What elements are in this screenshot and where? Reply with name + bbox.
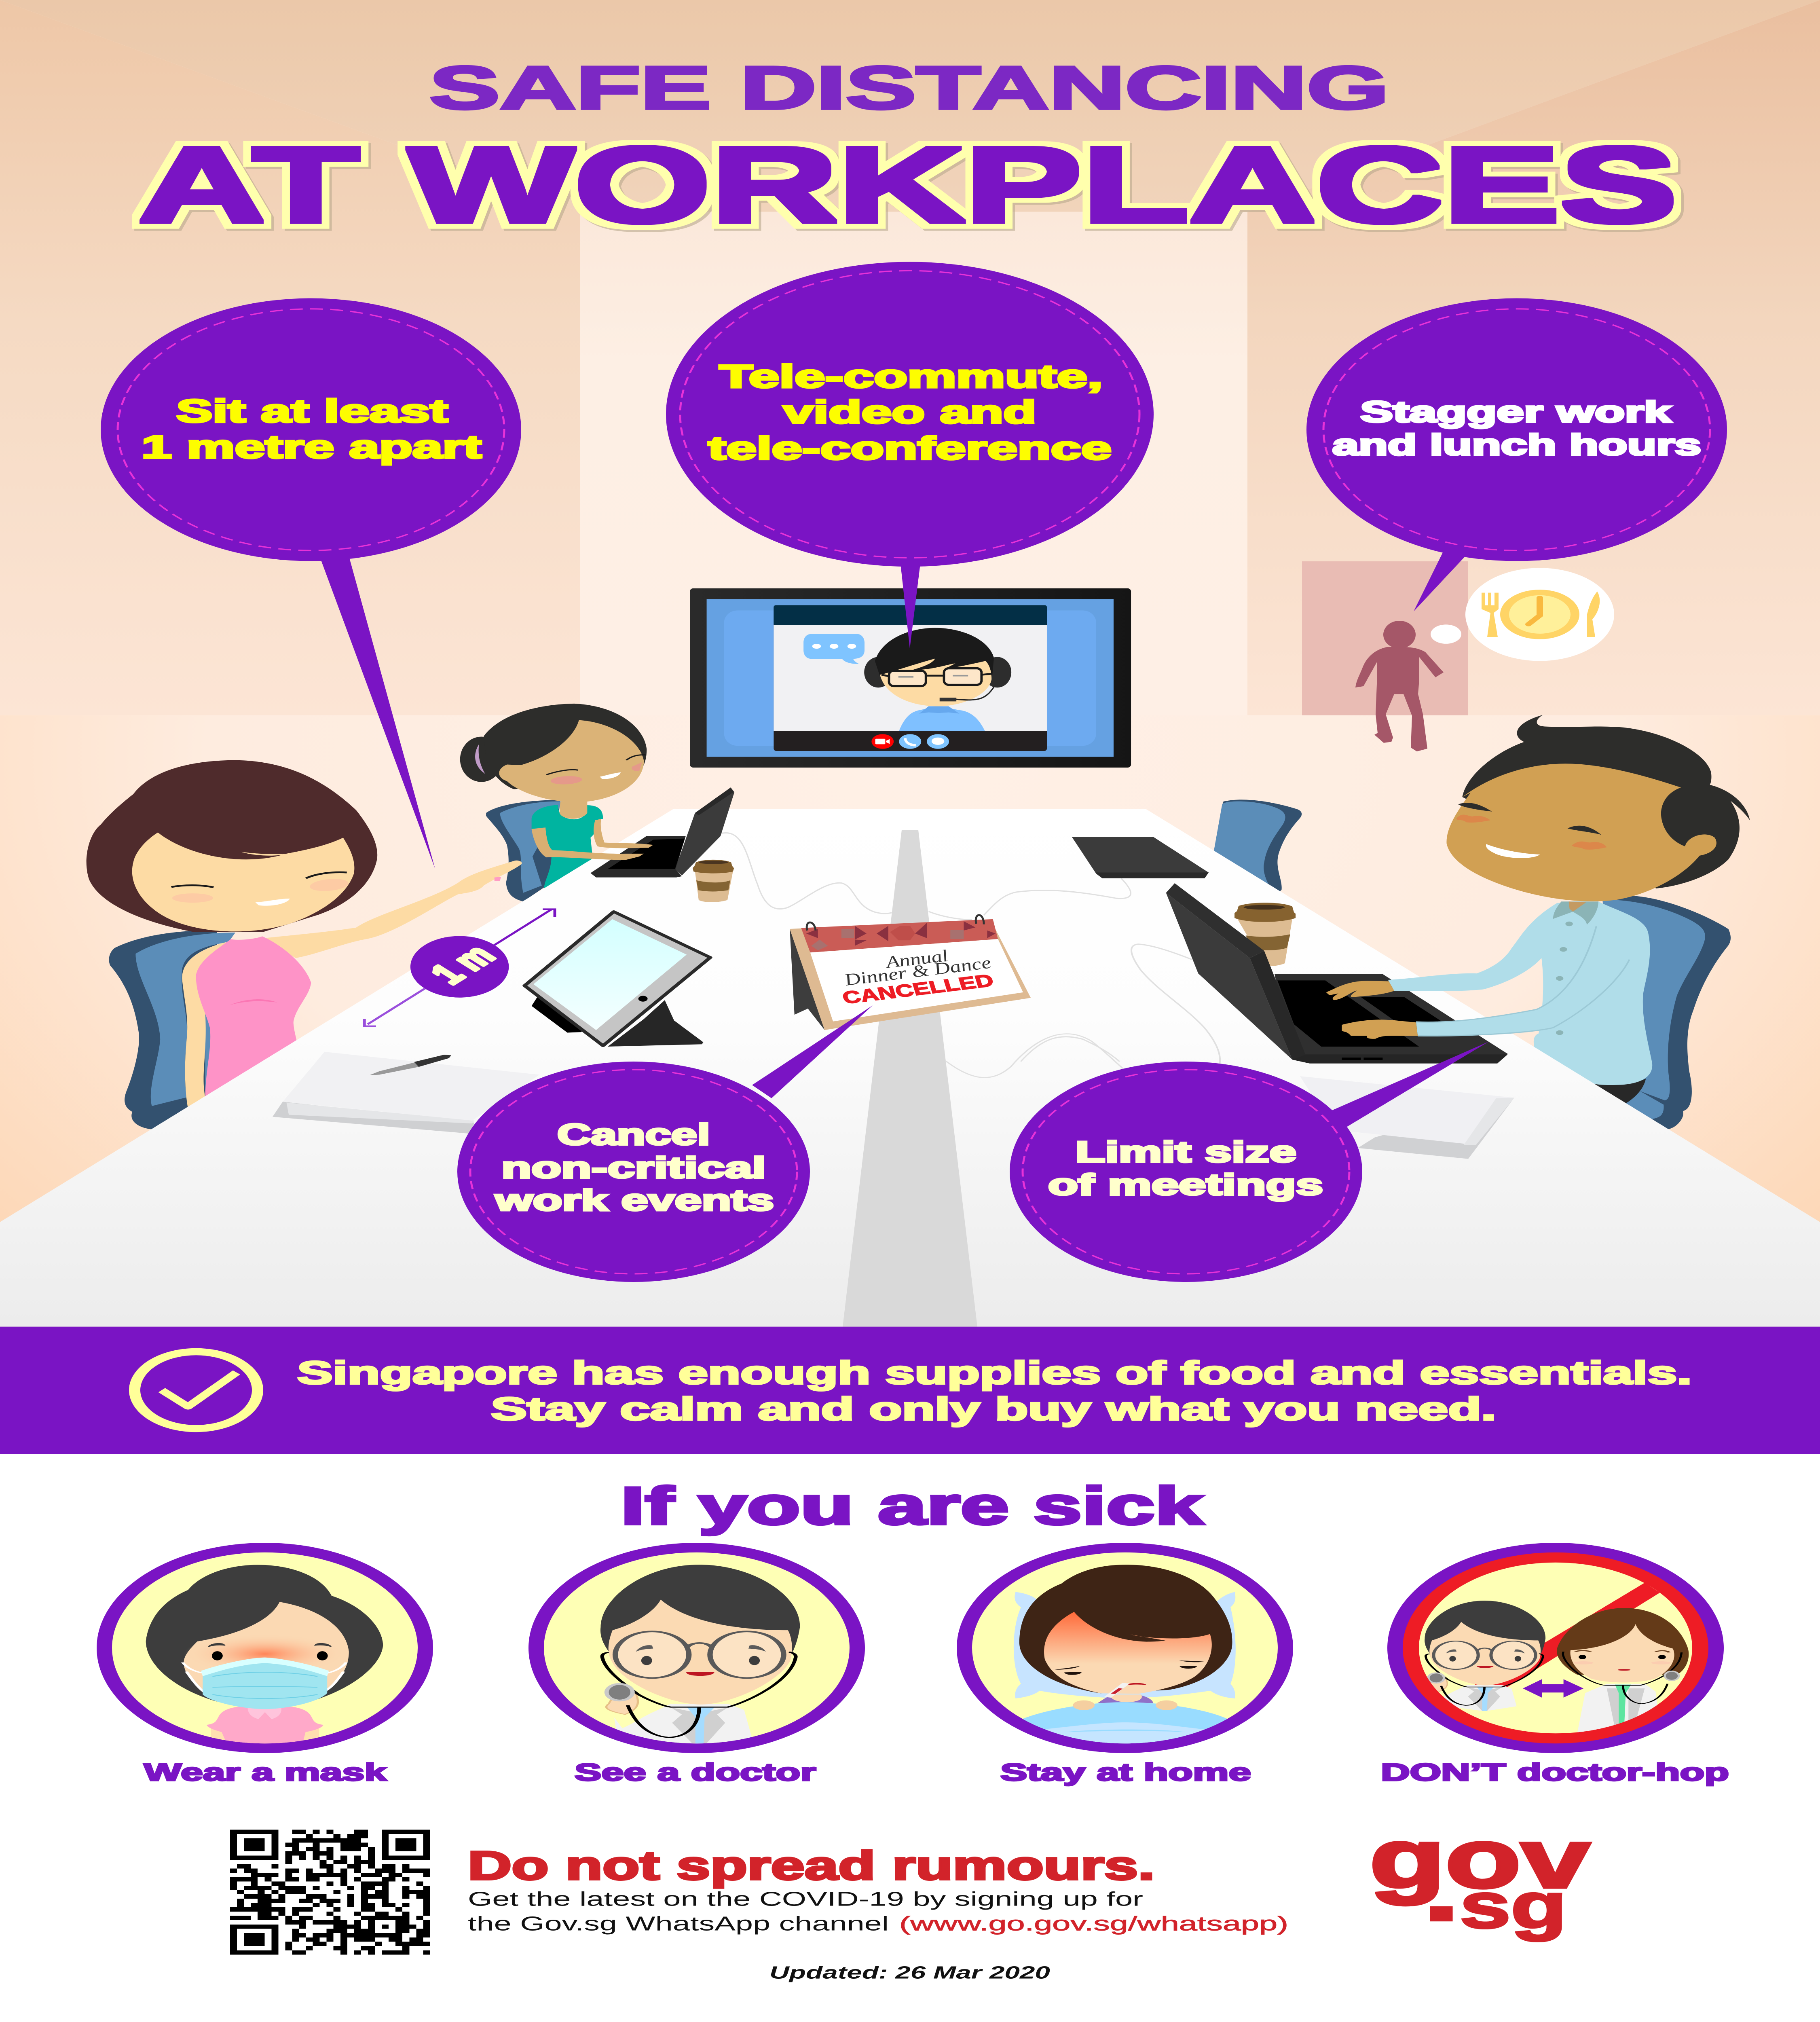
icon: pen bbox=[369, 1055, 451, 1075]
room background bbox=[0, 0, 1820, 1330]
icon: wear a mask bbox=[97, 1543, 433, 1753]
right paper bbox=[1300, 1076, 1514, 1159]
logo: gov.sg: . bbox=[1419, 1830, 1464, 1943]
callout: stagger work and lunch hours: Stagger work bbox=[1360, 395, 1671, 428]
calendar handwriting: dinner and dance: Dinner & Dance bbox=[841, 953, 993, 989]
callout: cancel non-critical work events bbox=[457, 1005, 873, 1282]
label: wear a mask: Wear a mask bbox=[144, 1759, 387, 1786]
video caller with headset bbox=[864, 628, 1011, 731]
chair: man bbox=[1602, 896, 1731, 1129]
white lower section bbox=[0, 1454, 1820, 2022]
callout: stagger work and lunch hours bbox=[1306, 298, 1727, 611]
cables on table bbox=[719, 833, 1220, 1078]
logo: gov.sg: gov bbox=[1370, 1812, 1591, 1906]
text block: whatsapp channel line 2: the Gov.sg WhatsApp channel bbox=[468, 1913, 889, 1935]
left woman pointing bbox=[87, 760, 522, 1129]
banner: supplies message bbox=[0, 1327, 1820, 1454]
tablet on stand bbox=[524, 912, 710, 1047]
table bbox=[0, 809, 1820, 1327]
banner: supplies message: Singapore has enough supplies of food and essentials. bbox=[297, 1354, 1692, 1391]
icon: chat bubble bbox=[803, 634, 865, 664]
callout: sit at least 1 metre apart bbox=[101, 298, 521, 869]
callout: cancel non-critical work events: Cancel bbox=[557, 1118, 710, 1151]
colleague at back left bbox=[460, 704, 647, 901]
callout: tele-commute: video and bbox=[783, 394, 1036, 430]
label: don't doctor-hop: DON’T doctor-hop bbox=[1381, 1759, 1729, 1786]
icon: see a doctor bbox=[528, 1543, 865, 1753]
one metre marker: 1 m bbox=[422, 939, 504, 990]
table divider bbox=[843, 830, 977, 1327]
label: see a doctor: See a doctor bbox=[575, 1759, 816, 1786]
callout: limit size of meetings bbox=[1010, 1042, 1489, 1282]
calendar handwriting: annual: Annual bbox=[882, 946, 950, 971]
man at right bbox=[1446, 715, 1750, 1129]
banner: supplies message: Stay calm and only buy what you need. bbox=[491, 1391, 1496, 1427]
call control buttons bbox=[871, 734, 949, 749]
label: stay at home: Stay at home bbox=[1000, 1759, 1251, 1786]
icon: check mark bbox=[135, 1352, 258, 1428]
callout: limit size of meetings: of meetings bbox=[1048, 1168, 1323, 1201]
callout: sit at least 1 metre apart: Sit at least bbox=[176, 393, 448, 429]
heading: if you are sick: If you are sick bbox=[621, 1476, 1204, 1536]
back closed laptop bbox=[1072, 837, 1209, 878]
calendar stamp: cancelled: CANCELLED bbox=[840, 971, 996, 1008]
back left laptop, cup and typing arms bbox=[532, 787, 734, 902]
icon: two-way arrow bbox=[1523, 1679, 1583, 1698]
callout: cancel non-critical work events: work events bbox=[495, 1183, 774, 1217]
callout: tele-commute bbox=[666, 262, 1154, 649]
callout: limit size of meetings: Limit size bbox=[1076, 1135, 1296, 1168]
callout: stagger work and lunch hours: and lunch hours bbox=[1332, 428, 1701, 461]
chair: left woman bbox=[109, 931, 235, 1129]
heading: do not spread rumours: Do not spread rumours. bbox=[468, 1843, 1155, 1888]
logo: gov.sg: sg bbox=[1460, 1870, 1567, 1942]
text block: whatsapp channel line 1: Get the latest on the COVID-19 by signing up for bbox=[468, 1888, 1143, 1910]
title: safe distancing: SAFE DISTANCING bbox=[429, 54, 1389, 122]
big laptop and cup on the right bbox=[1166, 883, 1508, 1064]
callout: sit at least 1 metre apart: 1 metre apart bbox=[142, 429, 482, 465]
thought bubble: meal clock bbox=[1431, 568, 1614, 661]
one metre marker bbox=[364, 909, 555, 1026]
icon: don't doctor-hop bbox=[1387, 1543, 1724, 1753]
icon: coffee cup right bbox=[1234, 903, 1296, 966]
icon: stay at home bbox=[957, 1543, 1293, 1753]
callout: tele-commute: Tele-commute, bbox=[719, 358, 1103, 394]
left paper and pen bbox=[273, 1052, 539, 1134]
callout: cancel non-critical work events: non-critical bbox=[501, 1151, 766, 1184]
calendar: event cancelled bbox=[790, 915, 1031, 1030]
title: at workplaces: AT WORKPLACES bbox=[138, 125, 1677, 245]
wall monitor with video call bbox=[690, 588, 1131, 768]
update date: Updated: 26 Mar 2020 bbox=[769, 1963, 1050, 1982]
man's arms and hands bbox=[1326, 926, 1631, 1039]
doorway with silhouette person bbox=[1302, 561, 1468, 751]
icon: coffee cup bbox=[693, 860, 734, 902]
link text: whatsapp url: (www.go.gov.sg/whatsapp) bbox=[899, 1913, 1288, 1935]
doctor with brown hair bbox=[1557, 1608, 1689, 1734]
callout: tele-commute: tele-conference bbox=[708, 430, 1112, 466]
back right chair bbox=[1214, 799, 1302, 891]
doctor with glasses bbox=[1425, 1601, 1545, 1711]
logo: gov.sg bbox=[1370, 1812, 1591, 1943]
QR code bbox=[230, 1830, 430, 1954]
